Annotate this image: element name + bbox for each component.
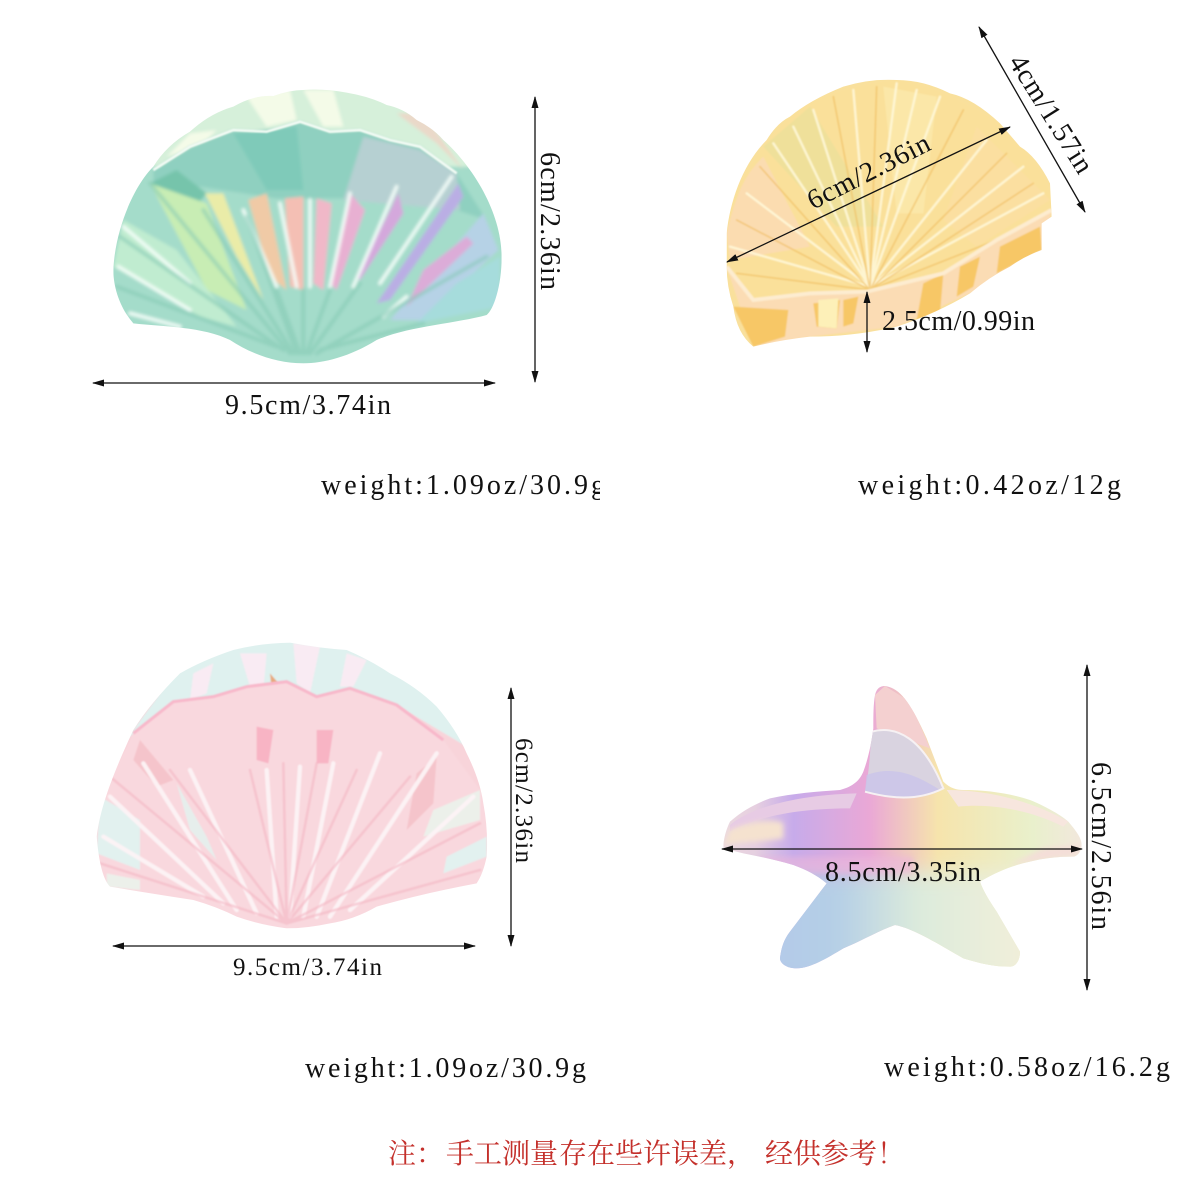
dimensions: yellow shell: 2.5cm/0.99in xyxy=(882,306,1035,337)
arrows: pink shell xyxy=(113,688,511,946)
ribs xyxy=(118,177,452,327)
dimensions: green shell: 6cm/2.36in xyxy=(534,152,565,290)
dimensions: starfish: 6.5cm/2.56in xyxy=(1085,762,1116,930)
front rim highlight xyxy=(153,122,457,173)
arrows: green shell xyxy=(93,97,535,383)
starfish hair claw xyxy=(724,686,1082,968)
dimensions: starfish: 8.5cm/3.35in xyxy=(825,857,981,888)
dimensions: pink shell: 6cm/2.36in xyxy=(510,738,537,864)
ribs xyxy=(103,753,473,917)
arrows: yellow shell xyxy=(727,27,1085,352)
back shell rim xyxy=(130,642,462,744)
inner body xyxy=(255,684,280,690)
weight: green shell: weight:1.09oz/30.9g xyxy=(321,470,605,501)
dimensions: yellow shell xyxy=(802,49,1099,337)
dimensions: green shell xyxy=(225,152,565,421)
weight: yellow shell: weight:0.42oz/12g xyxy=(858,470,1121,501)
dimensions: pink shell xyxy=(233,738,537,981)
slotted side wall xyxy=(727,210,1052,347)
green shell hair claw xyxy=(113,90,502,364)
yellow shell hair claw xyxy=(726,80,1052,346)
inner cavity xyxy=(153,122,487,220)
arrows: starfish xyxy=(722,665,1087,990)
shell top xyxy=(723,80,1053,300)
dimensions: pink shell: 9.5cm/3.74in xyxy=(233,954,382,981)
pink shell hair claw xyxy=(96,642,487,928)
upper arm xyxy=(875,686,930,748)
arm ridges xyxy=(730,793,857,832)
weight: pink shell: weight:1.09oz/30.9g xyxy=(305,1053,586,1084)
iridescent stripes xyxy=(150,183,247,310)
lower body tint xyxy=(780,862,1020,968)
dimensions: yellow shell: 4cm/1.57in xyxy=(1002,49,1099,179)
dimensions: green shell: 9.5cm/3.74in xyxy=(225,390,391,421)
back shell rim xyxy=(152,90,468,168)
ribs xyxy=(730,83,1043,287)
weight: starfish: weight:0.58oz/16.2g xyxy=(884,1052,1170,1083)
dimensions: starfish xyxy=(825,762,1116,930)
red measurement note: 注：手工测量存在些许误差，经供参考！ xyxy=(388,1132,905,1172)
dimensions: yellow shell: 6cm/2.36in xyxy=(802,128,936,216)
